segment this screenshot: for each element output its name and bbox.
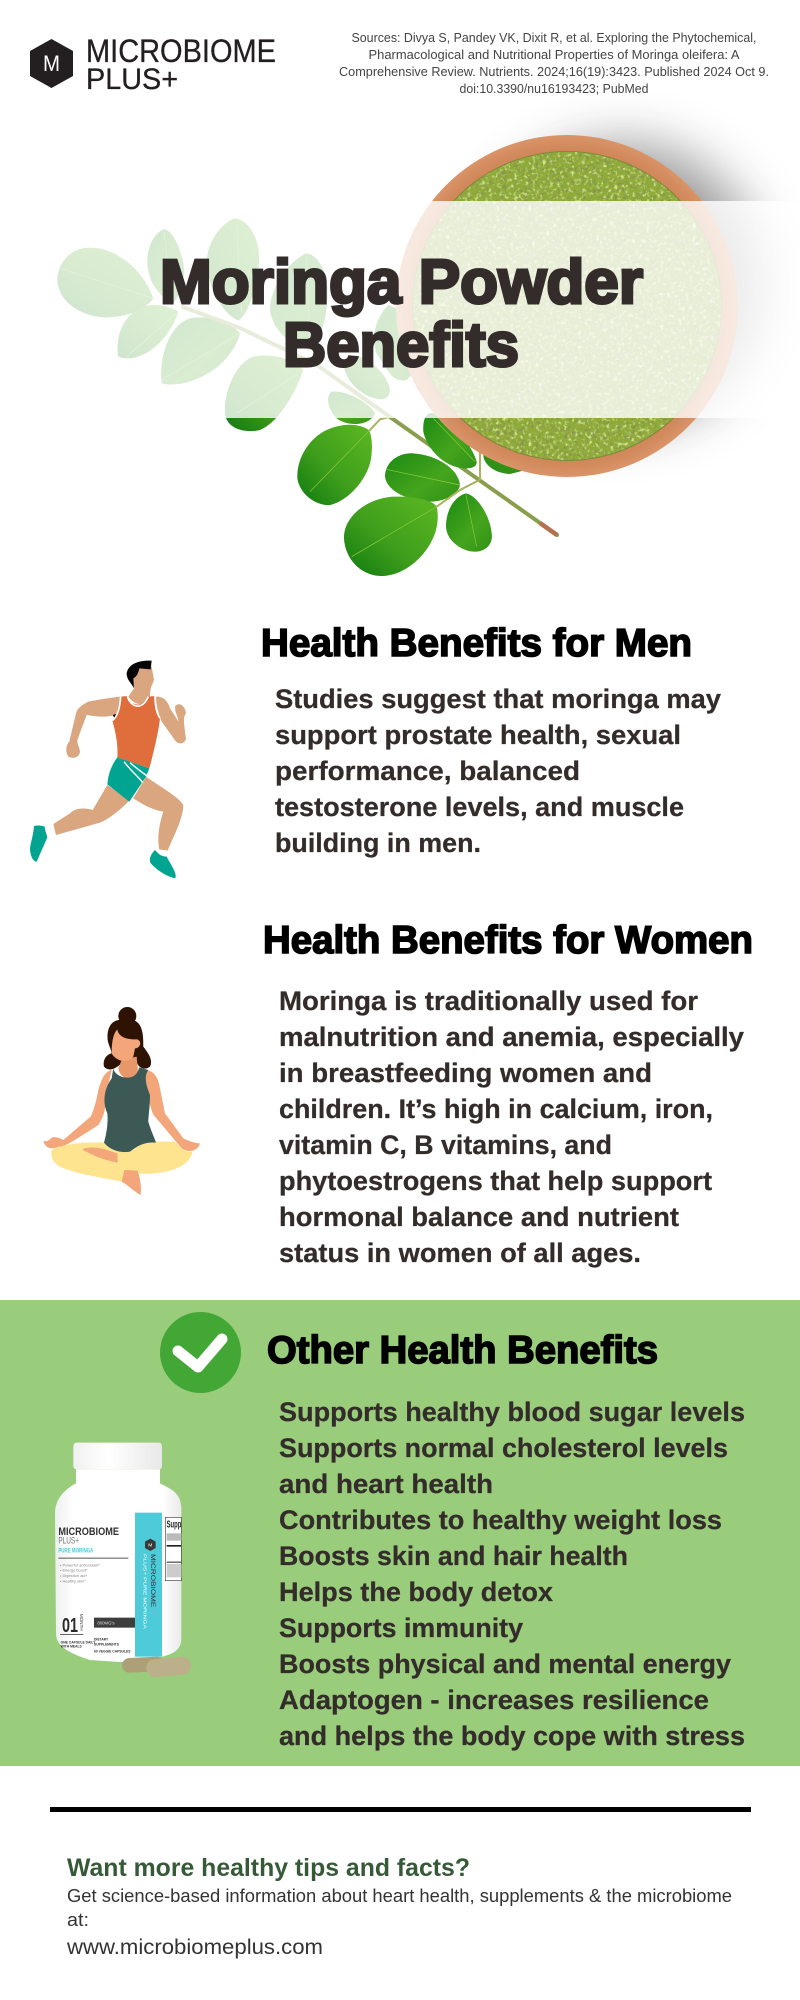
supplement bottle: 800MG's [97, 1620, 115, 1625]
supplement bottle: MICROBIOME [149, 1554, 156, 1608]
list: benefits: and heart health [279, 1469, 493, 1499]
heading: other benefits: Other Health Benefits [267, 1329, 658, 1372]
divider line [50, 1807, 751, 1812]
sources citation: Pharmacological and Nutritional Properties of Moringa oleifera: A [368, 47, 740, 62]
supplement bottle: • Energy boost* [60, 1568, 88, 1573]
footer call to action [66, 1854, 732, 1959]
hero image: moringa bowl and leaves [0, 135, 800, 576]
text: men: support prostate health, sexual [275, 720, 681, 750]
panel: men [30, 622, 721, 878]
supplement bottle: • Healthy skin* [60, 1578, 86, 1583]
icon: running man [30, 661, 186, 878]
text: men: performance, balanced [275, 756, 580, 786]
footer text [66, 1886, 732, 1959]
supplement bottle: DIETARY [94, 1638, 109, 1642]
logo wordmark [86, 33, 276, 96]
supplement bottle: MONTH [79, 1614, 84, 1631]
text: women: status in women of all ages. [279, 1238, 641, 1268]
footer heading: Want more healthy tips and facts? [67, 1854, 470, 1882]
supplement bottle: 01 [62, 1614, 78, 1637]
supplement bottle: PLUS+ [58, 1535, 79, 1545]
text: men: Studies suggest that moringa may [275, 684, 721, 714]
supplement bottle: WITH MEALS [61, 1644, 83, 1648]
supplement bottle [55, 1443, 192, 1678]
title [160, 248, 643, 380]
supplement bottle: ONE CAPSULE DAILY [61, 1640, 96, 1644]
list: benefits: Contributes to healthy weight loss [279, 1505, 722, 1535]
supplement bottle: MICROBIOME [58, 1526, 119, 1538]
heading: men: Health Benefits for Men [261, 622, 692, 665]
logo wordmark: PLUS+ [86, 63, 178, 96]
vivid leaves [297, 413, 523, 576]
wooden bowl [396, 135, 738, 477]
title: Benefits [283, 311, 519, 380]
text: men: testosterone levels, and muscle [275, 792, 684, 822]
bowl shadow [480, 143, 764, 427]
icon: hexagon M [30, 39, 73, 88]
text: women: in breastfeeding women and [279, 1058, 652, 1088]
supplement bottle: PURE MORINGA [58, 1548, 94, 1554]
text: women: children. It’s high in calcium, iron, [279, 1094, 713, 1124]
list: benefits: Boosts physical and mental energy [279, 1649, 731, 1679]
icon: hexagon M: M [43, 51, 60, 76]
supplement bottle: Supp [167, 1520, 181, 1531]
supplement bottle: • Digestion aid* [60, 1573, 88, 1578]
sources citation [339, 30, 769, 96]
text: men [275, 684, 721, 858]
white title band [0, 201, 800, 418]
heading: women: Health Benefits for Women [263, 919, 753, 962]
text: women [279, 986, 744, 1268]
green background [0, 1300, 800, 1766]
list: benefits: and helps the body cope with stress [279, 1721, 745, 1751]
title: Moringa Powder [160, 248, 643, 317]
list: benefits: Supports immunity [279, 1613, 523, 1643]
supplement bottle: SUPPLEMENTS [94, 1642, 120, 1646]
faded leaves [57, 218, 420, 431]
supplement bottle: • Powerful antioxidant* [60, 1562, 100, 1567]
supplement bottle: M [148, 1543, 152, 1549]
leaf stem [183, 307, 557, 535]
text: women: phytoestrogens that help support [279, 1166, 712, 1196]
list: benefits [279, 1397, 745, 1751]
list: benefits: Helps the body detox [279, 1577, 553, 1607]
list: benefits: Supports normal cholesterol levels [279, 1433, 728, 1463]
list: benefits: Boosts skin and hair health [279, 1541, 628, 1571]
logo wordmark: MICROBIOME [86, 33, 276, 69]
text: women: hormonal balance and nutrient [279, 1202, 679, 1232]
list: benefits: Supports healthy blood sugar levels [279, 1397, 745, 1427]
text: women: Moringa is traditionally used for [279, 986, 698, 1016]
list: benefits: Adaptogen - increases resilience [279, 1685, 709, 1715]
text: men: building in men. [275, 828, 481, 858]
supplement bottle: 60 VEGGIE CAPSULES [94, 1649, 131, 1653]
panel: other health benefits [0, 1300, 800, 1766]
text: women: vitamin C, B vitamins, and [279, 1130, 612, 1160]
footer text: at: [67, 1910, 89, 1930]
logo [30, 33, 276, 96]
sources citation: doi:10.3390/nu16193423; PubMed [460, 81, 648, 96]
footer text: Get science-based information about heart health, supplements & the microbiome [67, 1886, 732, 1906]
panel: women [43, 919, 753, 1268]
footer text: www.microbiomeplus.com [66, 1936, 323, 1959]
supplement bottle: PLUS+ PURE MORINGA [142, 1554, 148, 1630]
sources citation: Comprehensive Review. Nutrients. 2024;16(19):3423. Published 2024 Oct 9. [339, 64, 769, 79]
text: women: malnutrition and anemia, especially [279, 1022, 744, 1052]
icon: meditating woman [43, 1007, 200, 1195]
icon: check mark [160, 1312, 241, 1393]
sources citation: Sources: Divya S, Pandey VK, Dixit R, et al. Exploring the Phytochemical, [352, 30, 756, 45]
